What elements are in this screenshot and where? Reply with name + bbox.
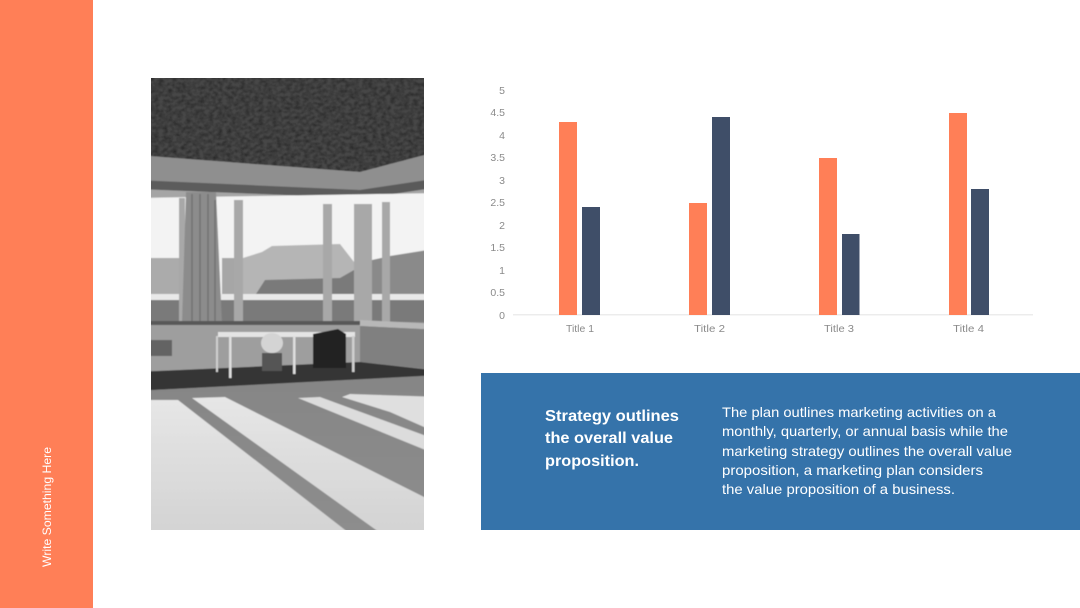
bars: Title 3: [819, 158, 860, 315]
panel body text: [722, 404, 1012, 497]
chart x axis labels: Title 3: [824, 323, 854, 335]
panel body text: proposition, a marketing plan considers: [722, 462, 983, 478]
chart y axis labels: 0: [499, 310, 505, 322]
photo beam: [151, 154, 424, 198]
photo desk and chair: [151, 328, 424, 390]
panel: strategy text: [481, 373, 1080, 530]
photo wall: [135, 320, 440, 371]
chart y axis labels: 1: [499, 265, 505, 277]
panel body text: monthly, quarterly, or annual basis while the: [722, 423, 1008, 439]
bars: Title 4: [949, 113, 989, 315]
chart y axis labels: 4: [499, 130, 505, 142]
chart y axis labels: 3: [499, 175, 505, 187]
chart y axis labels: 2: [499, 220, 505, 232]
chart y axis labels: 1.5: [490, 242, 505, 254]
chart y axis labels: [490, 85, 505, 322]
sidebar band: [0, 0, 93, 608]
photo curtain: [182, 192, 222, 324]
photo ceiling: [151, 78, 424, 172]
chart y axis labels: 5: [499, 85, 505, 97]
chart x axis labels: Title 1: [566, 323, 594, 335]
chart x axis labels: Title 4: [953, 323, 984, 335]
panel heading: the overall value: [545, 430, 673, 447]
chart x axis labels: Title 2: [694, 323, 725, 335]
photo windows: [151, 192, 424, 322]
chart y axis labels: 2.5: [490, 197, 505, 209]
panel body text: marketing strategy outlines the overall value: [722, 443, 1012, 459]
panel heading: proposition.: [545, 453, 639, 470]
panel body text: the value proposition of a business.: [722, 481, 955, 497]
bar chart: [490, 85, 1033, 335]
chart y axis labels: 4.5: [490, 107, 505, 119]
chart y axis labels: 0.5: [490, 287, 505, 299]
panel heading: [545, 408, 679, 470]
chart y axis labels: 3.5: [490, 152, 505, 164]
photo floor: [151, 375, 424, 530]
chart x axis labels: [566, 323, 984, 335]
panel body text: The plan outlines marketing activities on a: [722, 404, 996, 420]
photo: empty room with windows: [151, 78, 424, 530]
bars: Title 2: [689, 117, 730, 315]
photo window frames: [179, 198, 390, 322]
sidebar vertical text: Write Something Here: [40, 447, 54, 567]
bars: Title 1: [559, 122, 600, 315]
panel heading: Strategy outlines: [545, 408, 679, 425]
